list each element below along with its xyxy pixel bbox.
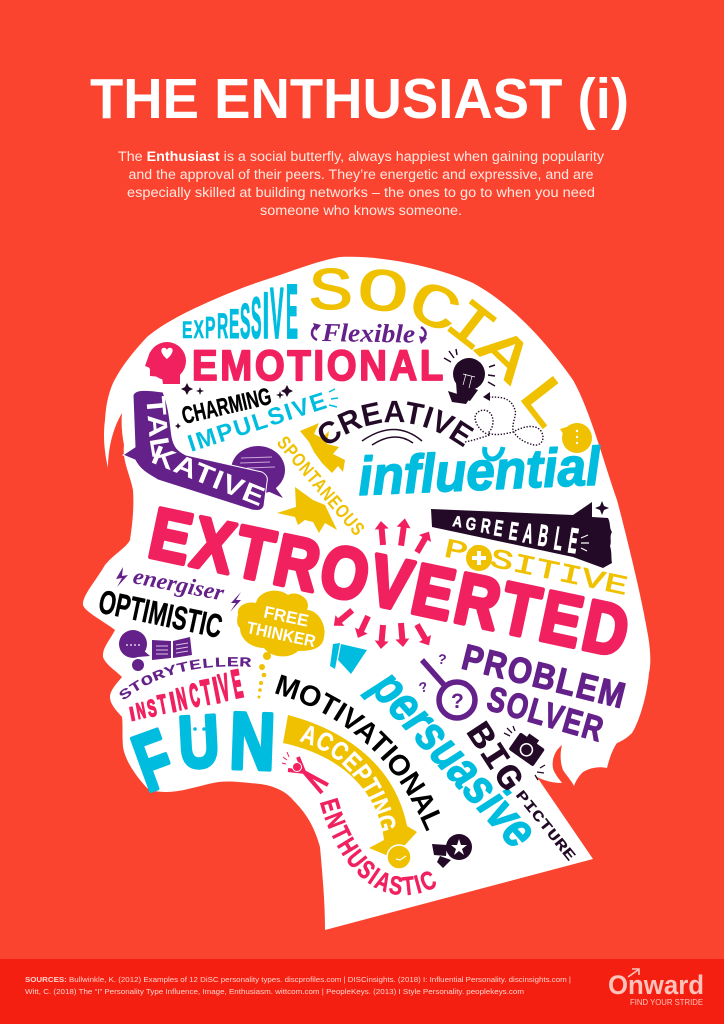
word: STORYTELLER: STORYTELLER [120, 657, 252, 700]
logo: Onward: FIND YOUR STRIDE [630, 997, 703, 1007]
icon: megaphone [330, 643, 367, 674]
intro paragraph: The Enthusiast is a social butterfly, always happiest when gaining popularity [118, 149, 604, 164]
cloud: FREE THINKER: FREE [262, 603, 310, 631]
word: EMOTIONAL: EMOTIONAL [192, 342, 446, 390]
icon: speech bubble and book [119, 630, 192, 671]
banner: AGREEABLE thumb: A [521, 517, 536, 550]
word: EXTROVERTED: EXTROVERTED [143, 493, 639, 674]
word: INSTINCTIVE [128, 662, 246, 726]
word: EXPRESSIVE: S [240, 294, 250, 349]
word: MOTIVATIONAL: MOTIVATIONAL [275, 674, 440, 832]
word: INSTINCTIVE: I [167, 687, 179, 719]
cloud: FREE THINKER [237, 591, 325, 656]
word: PICTURE: PICTURE [511, 787, 578, 865]
word: EXPRESSIVE: P [205, 312, 215, 346]
word: INSTINCTIVE: S [145, 696, 159, 723]
banner: AGREEABLE thumb: E [566, 521, 581, 561]
icon: head with heart [145, 342, 186, 384]
sources text [25, 975, 571, 996]
word: SOCIAL [308, 259, 584, 444]
sources text: Witt, C. (2018) The “I” Personality Type Influence, Image, Enthusiasm. wittcom.com | PeopleKeys. (2013) I Style Personality. peoplekeys.com [25, 987, 524, 996]
banner: AGREEABLE thumb: G [464, 515, 478, 535]
banner: AGREEABLE thumb: E [492, 515, 505, 541]
word: EXPRESSIVE: I [262, 280, 269, 353]
icon: rosette [432, 834, 472, 868]
word: FUN with smile: U [177, 700, 221, 784]
word: POSITIVE: POSITIVE [441, 535, 630, 604]
impulsive spark lines [329, 389, 338, 407]
burst below SPONTANEOUS [277, 487, 337, 533]
word: FUN with smile: F [123, 714, 184, 808]
word: influential: influential [357, 436, 602, 507]
word: energiser with bolts [116, 563, 241, 612]
word: PROBLEM: PROBLEM [458, 636, 631, 716]
banner: AGREEABLE thumb: B [536, 518, 551, 553]
word: CREATIVE: CREATIVE [318, 400, 474, 448]
word: ENTHUSIASTIC: ENTHUSIASTIC [320, 798, 436, 896]
word: OPTIMISTIC: OPTIMISTIC [96, 583, 226, 645]
icon: lightbulb [444, 349, 495, 404]
sources text: SOURCES: Bullwinkle, K. (2012) Examples of 12 DiSC personality types. discprofiles.com | DISCinsights. (2018) I: Influential Personality. discinsights.com | [25, 975, 571, 984]
intro paragraph: someone who knows someone. [260, 203, 462, 218]
word: INSTINCTIVE: N [134, 698, 148, 724]
arrow: ACCEPTING [283, 715, 417, 868]
word: INSTINCTIVE: N [174, 683, 190, 718]
word: persuasive: persuasive [360, 658, 548, 858]
banner: AGREEABLE thumb [431, 502, 612, 568]
icon: magnifying glass: ? [437, 651, 447, 668]
banner: AGREEABLE thumb: A [451, 513, 463, 532]
icon: camera [504, 726, 547, 780]
word: POSITIVE [441, 535, 630, 604]
word: FUN with smile: N [228, 697, 277, 787]
head silhouette [83, 257, 650, 930]
word: SOCIAL: O [353, 259, 412, 331]
cloud: FREE THINKER: THINKER [245, 618, 317, 651]
banner: AGREEABLE thumb: L [552, 520, 566, 558]
word: EXPRESSIVE: R [217, 307, 228, 346]
intro paragraph [118, 149, 604, 218]
banner: AGREEABLE thumb: R [479, 513, 493, 538]
word: SOCIAL: I [431, 287, 508, 368]
icon: purple speech bubble [231, 446, 285, 498]
icon: yellow speech bubble [560, 423, 592, 453]
intro paragraph: especially skilled at building networks – the ones to go to when you need [127, 185, 595, 200]
word: EXPRESSIVE: E [182, 318, 192, 344]
word: EXPRESSIVE: E [229, 300, 239, 347]
word: EXPRESSIVE: S [251, 286, 261, 352]
word: INSTINCTIVE: I [128, 704, 137, 726]
icon: jumping person [282, 752, 328, 793]
word: SOCIAL: A [461, 314, 545, 399]
word: SOCIAL: S [308, 260, 354, 328]
word: INSTINCTIVE: T [155, 689, 170, 720]
arrow: ACCEPTING: ACCEPTING [300, 726, 396, 832]
word: BIG: BIG [456, 715, 531, 800]
banner: TALKATIVE: TALKATIVE [146, 396, 265, 506]
word: SOLVER: SOLVER [483, 679, 609, 750]
thought dots [258, 652, 271, 698]
logo: Onward: Onward [608, 970, 704, 1000]
icon: dotted looping arrow [465, 392, 543, 445]
word: INSTINCTIVE: T [198, 673, 215, 713]
word: SOCIAL: L [501, 364, 584, 444]
banner: AGREEABLE thumb: E [507, 518, 520, 547]
arrows around EXTROVERTED [329, 517, 435, 650]
word: INSTINCTIVE: I [210, 671, 223, 712]
icon: magnifying glass: ? [451, 690, 464, 713]
icon: magnifying glass [417, 651, 475, 718]
word: INSTINCTIVE: E [228, 662, 246, 707]
icon: magnet [485, 447, 503, 459]
word: CHARMING: CHARMING [179, 383, 274, 430]
intro paragraph: and the approval of their peers. They’re energetic and expressive, and are [128, 167, 594, 182]
footer band [0, 959, 724, 1024]
word: SPONTANEOUS: SPONTANEOUS [272, 433, 369, 541]
title: THE ENTHUSIAST (i) [90, 67, 629, 131]
sparkles [175, 383, 293, 429]
word: IMPULSIVE: IMPULSIVE [185, 388, 330, 458]
word: INSTINCTIVE: C [187, 678, 203, 715]
word: SOCIAL: C [397, 268, 470, 351]
icon: magnifying glass: ? [417, 678, 429, 696]
word: energiser with bolts: energiser [131, 563, 227, 606]
word: INSTINCTIVE: V [216, 667, 233, 710]
word: EXPRESSIVE: V [270, 274, 284, 354]
word: EXPRESSIVE [182, 269, 298, 355]
word: FUN with smile [123, 697, 277, 808]
sparkle near thumb [595, 501, 609, 515]
word: Flexible with arrows: Flexible [321, 318, 415, 349]
word: EXPRESSIVE: E [286, 269, 298, 355]
word: EXPRESSIVE: X [194, 316, 204, 344]
burst shape beside CREATIVE [300, 423, 345, 473]
